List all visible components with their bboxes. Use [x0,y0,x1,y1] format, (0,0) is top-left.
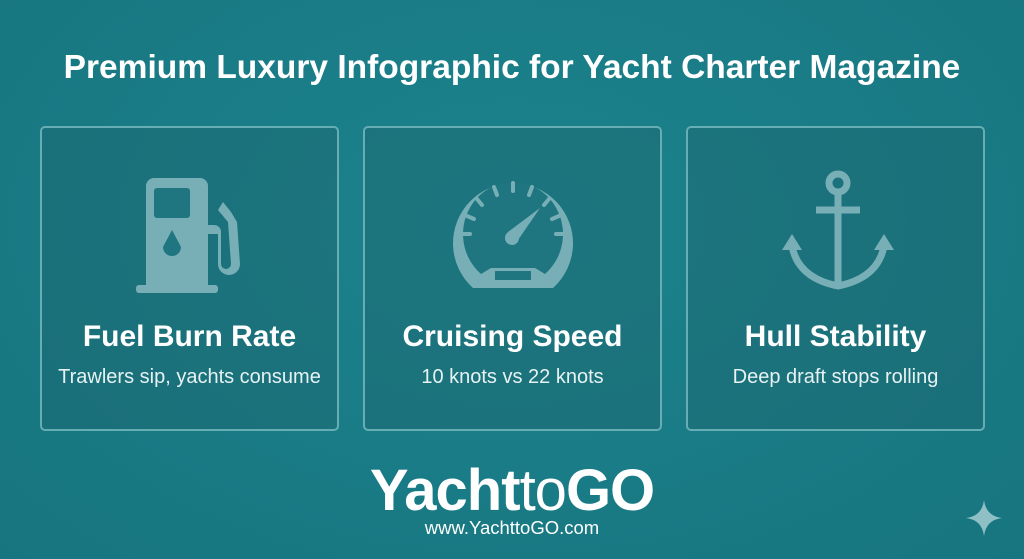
icon: fuel pump [136,178,240,293]
heading: Fuel Burn Rate [83,320,296,353]
subtitle: 10 knots vs 22 knots [421,366,604,388]
subtitle: Trawlers sip, yachts consume [58,366,321,388]
icon: speedometer [453,181,573,288]
icon: anchor [782,170,894,290]
panel: fuel burn rate [40,126,339,431]
panel: cruising speed [363,126,662,431]
heading: Cruising Speed [402,320,623,353]
url: www.YachttoGO.com [425,517,599,538]
icon: sparkle [966,500,1002,536]
logo: YachttoGO [370,458,654,523]
panel: hull stability [686,126,985,431]
subtitle: Deep draft stops rolling [733,366,938,388]
heading: Hull Stability [745,320,926,353]
title: Premium Luxury Infographic for Yacht Charter Magazine [64,49,960,86]
